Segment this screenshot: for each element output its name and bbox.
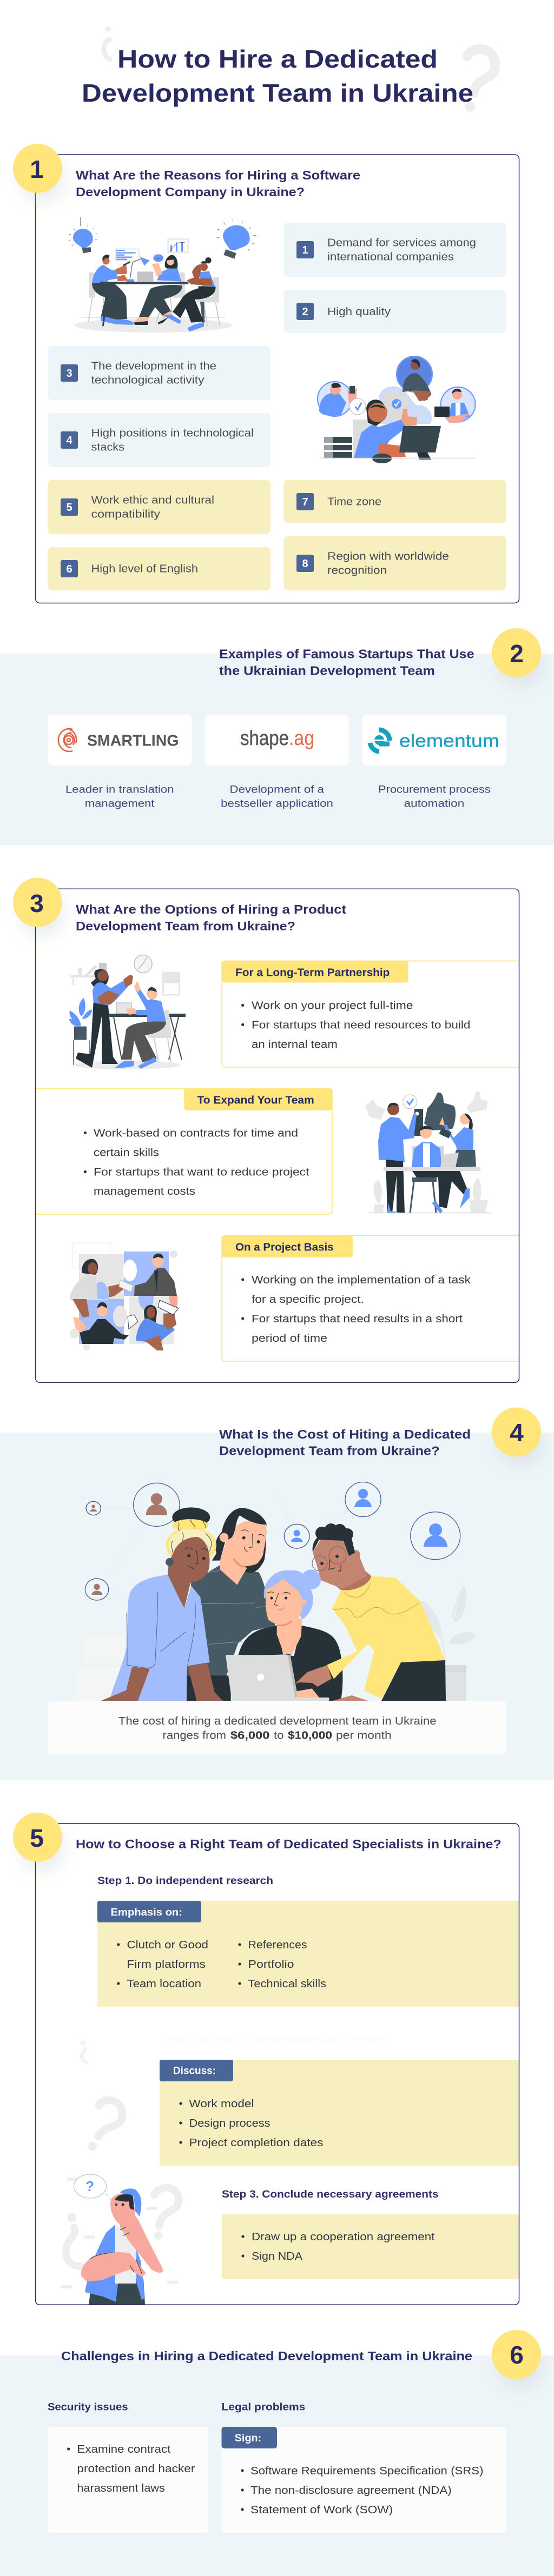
option box: expand your team: Work-based on contracts for time and	[94, 1128, 298, 1140]
option box: project basis: for a specific project.	[252, 1294, 364, 1306]
step 2 box: Work model	[189, 2098, 254, 2110]
heading 4: What Is the Cost of Hiting a Dedicated	[219, 1427, 471, 1441]
badge 6: 6	[510, 2341, 524, 2369]
callout: cost range: $10,000	[288, 1729, 332, 1741]
captions: bestseller application	[221, 798, 333, 810]
panel: section 5 choosing a team	[13, 1813, 519, 2305]
card 6	[48, 547, 271, 590]
step 3 box	[222, 2189, 519, 2279]
step 1 box: Step 1. Do independent research	[97, 1875, 273, 1887]
badge 2	[492, 628, 541, 677]
callout: cost range: to	[274, 1729, 283, 1741]
step 2 box: Project completion dates	[189, 2137, 324, 2149]
badge 2: 2	[510, 640, 524, 668]
logo card: shape.ag: shape	[240, 727, 289, 750]
card 3: technological activity	[91, 374, 205, 386]
column: security issues: harassment laws	[77, 2482, 165, 2494]
option box: long-term partnership: Work on your project full-time	[252, 1000, 413, 1011]
step 3 box: Draw up a cooperation agreement	[252, 2231, 435, 2243]
step 2 box: Design process	[189, 2118, 271, 2129]
step 1 box	[97, 1875, 519, 2007]
option box: project basis	[222, 1235, 519, 1361]
captions: management	[85, 798, 155, 810]
illustration: thinking man with question marks	[61, 2040, 179, 2305]
step 3 box: Step 3. Conclude necessary agreements	[222, 2189, 439, 2200]
card 7	[283, 480, 506, 523]
heading 1	[76, 168, 360, 199]
option box: project basis: On a Project Basis	[235, 1241, 334, 1253]
column: legal problems	[222, 2401, 506, 2533]
card 8	[283, 536, 506, 590]
illustration: puzzle of four collaborating people	[70, 1243, 179, 1350]
card 7: 7	[302, 496, 308, 508]
column: security issues: protection and hacker	[77, 2463, 195, 2475]
card 1: international companies	[327, 251, 454, 263]
heading 2	[219, 647, 474, 678]
option box: expand your team: To Expand Your Team	[197, 1094, 314, 1106]
step 1 box: Portfolio	[248, 1959, 294, 1971]
heading 1: What Are the Reasons for Hiring a Software	[76, 168, 360, 182]
panel: section 2 startups	[0, 628, 554, 846]
step 2 box: Discuss:	[173, 2066, 216, 2077]
card 2	[283, 290, 506, 333]
heading 2: Examples of Famous Startups That Use	[219, 647, 474, 661]
callout: cost range: per month	[336, 1729, 392, 1741]
badge 4	[492, 1408, 541, 1456]
card 4: stacks	[91, 441, 124, 453]
card 4: 4	[66, 435, 72, 447]
column: legal problems: Software Requirements Specification (SRS)	[250, 2465, 484, 2477]
column: legal problems: Sign:	[235, 2433, 261, 2444]
card 8: 8	[302, 558, 308, 570]
column: security issues: Security issues	[48, 2401, 128, 2413]
option box: expand your team: For startups that want to reduce project	[94, 1167, 309, 1179]
step 1 box: Clutch or Good	[127, 1939, 208, 1951]
step 1 box: Technical skills	[248, 1978, 326, 1990]
heading 4	[219, 1427, 471, 1457]
panel: section 4 cost	[0, 1408, 554, 1780]
column: security issues	[48, 2401, 208, 2533]
callout: cost range	[48, 1701, 506, 1755]
card 2: High quality	[327, 306, 391, 318]
step 3 box: Sign NDA	[252, 2251, 303, 2262]
card 6: High level of English	[91, 563, 198, 575]
option box: project basis: period of time	[252, 1333, 327, 1344]
card 1	[283, 223, 506, 277]
logo card: Smartling: SMARTLING	[87, 732, 179, 749]
card 2: 2	[302, 306, 308, 318]
captions: Procurement process	[378, 784, 491, 796]
card 5	[48, 480, 271, 534]
option box: long-term partnership: For a Long-Term Partnership	[235, 967, 390, 979]
title with decorative question marks	[82, 26, 495, 111]
heading 2: the Ukrainian Development Team	[219, 664, 435, 678]
logo card: elementum	[362, 715, 506, 766]
captions: Development of a	[229, 784, 324, 796]
title with decorative question marks: Development Team in Ukraine	[82, 79, 473, 107]
heading 6: Challenges in Hiring a Dedicated Development Team in Ukraine	[61, 2349, 472, 2363]
heading 3	[76, 902, 346, 933]
option box: expand your team: management costs	[94, 1186, 195, 1197]
captions	[65, 784, 491, 810]
title with decorative question marks: How to Hire a Dedicated	[117, 45, 438, 73]
illustration: four colleagues around a laptop with network avatars	[76, 1482, 475, 1701]
card 1: Demand for services among	[327, 237, 476, 249]
column: legal problems: Legal problems	[222, 2401, 305, 2413]
option box: long-term partnership	[222, 961, 519, 1067]
heading 3: What Are the Options of Hiring a Product	[76, 902, 346, 916]
card 8: recognition	[327, 564, 387, 576]
card 5: 5	[66, 502, 72, 514]
badge 3	[13, 878, 62, 927]
badge 6	[492, 2330, 541, 2379]
illustration: team with thumbs up	[366, 1091, 491, 1214]
column: security issues: Examine contract	[77, 2444, 171, 2455]
card 3	[48, 346, 271, 400]
option box: project basis: Working on the implementation of a task	[252, 1274, 471, 1286]
option box: expand your team: certain skills	[94, 1147, 159, 1159]
badge 5	[13, 1813, 62, 1862]
illustration: team meeting at table with light bulbs	[69, 217, 256, 332]
heading 3: Development Team from Ukraine?	[76, 919, 295, 933]
option box: project basis: For startups that need results in a short	[252, 1313, 463, 1325]
badge 1	[13, 144, 62, 193]
card 5: Work ethic and cultural	[91, 494, 214, 506]
panel: section 1 reasons	[13, 144, 519, 603]
column: legal problems: The non-disclosure agreement (NDA)	[250, 2485, 452, 2497]
heading 5: How to Choose a Right Team of Dedicated Specialists in Ukraine?	[76, 1837, 502, 1851]
badge 3: 3	[30, 889, 44, 917]
badge 1: 1	[30, 155, 44, 183]
captions: Leader in translation	[65, 784, 174, 796]
option box: long-term partnership: For startups that need resources to build	[252, 1020, 470, 1031]
card 4	[48, 413, 271, 467]
panel: section 6 challenges	[0, 2330, 554, 2576]
card 5: compatibility	[91, 508, 160, 520]
card 4: High positions in technological	[91, 427, 254, 439]
card 1: 1	[302, 244, 308, 256]
step 1 box: Firm platforms	[127, 1959, 206, 1971]
card 3: 3	[66, 368, 72, 380]
option box: expand your team	[36, 1088, 333, 1214]
callout: cost range: The cost of hiring a dedicated development team in Ukraine	[118, 1715, 437, 1727]
illustration: remote specialists and security shield	[318, 356, 475, 463]
logo card: Smartling	[48, 715, 192, 766]
badge 5: 5	[30, 1824, 44, 1852]
step 2 box: Step 2. Schedule a meeting with the team	[160, 2034, 388, 2045]
callout: cost range: ranges from	[162, 1729, 226, 1741]
callout: cost range: $6,000	[230, 1729, 269, 1741]
step 2 box	[160, 2034, 519, 2166]
option box: long-term partnership: an internal team	[252, 1039, 338, 1051]
step 1 box: References	[248, 1939, 307, 1951]
logo card: elementum: elementum	[399, 731, 499, 751]
card 3: The development in the	[91, 360, 216, 372]
card 6: 6	[66, 563, 72, 575]
logo card: shape.ag	[205, 715, 349, 766]
illustration: thinking man with question marks: ?	[85, 2178, 94, 2194]
card 8: Region with worldwide	[327, 550, 449, 562]
step 1 box: Team location	[127, 1978, 201, 1990]
column: legal problems: Statement of Work (SOW)	[250, 2504, 393, 2516]
heading 1: Development Company in Ukraine?	[76, 185, 305, 199]
panel: section 3 hiring options	[13, 878, 519, 1382]
card 7: Time zone	[327, 496, 381, 508]
badge 4: 4	[510, 1419, 524, 1447]
logo card: shape.ag: .ag	[289, 727, 314, 750]
illustration: high five in the office	[69, 955, 186, 1069]
captions: automation	[404, 798, 464, 810]
heading 4: Development Team from Ukraine?	[219, 1443, 439, 1457]
step 1 box: Emphasis on:	[110, 1907, 182, 1918]
